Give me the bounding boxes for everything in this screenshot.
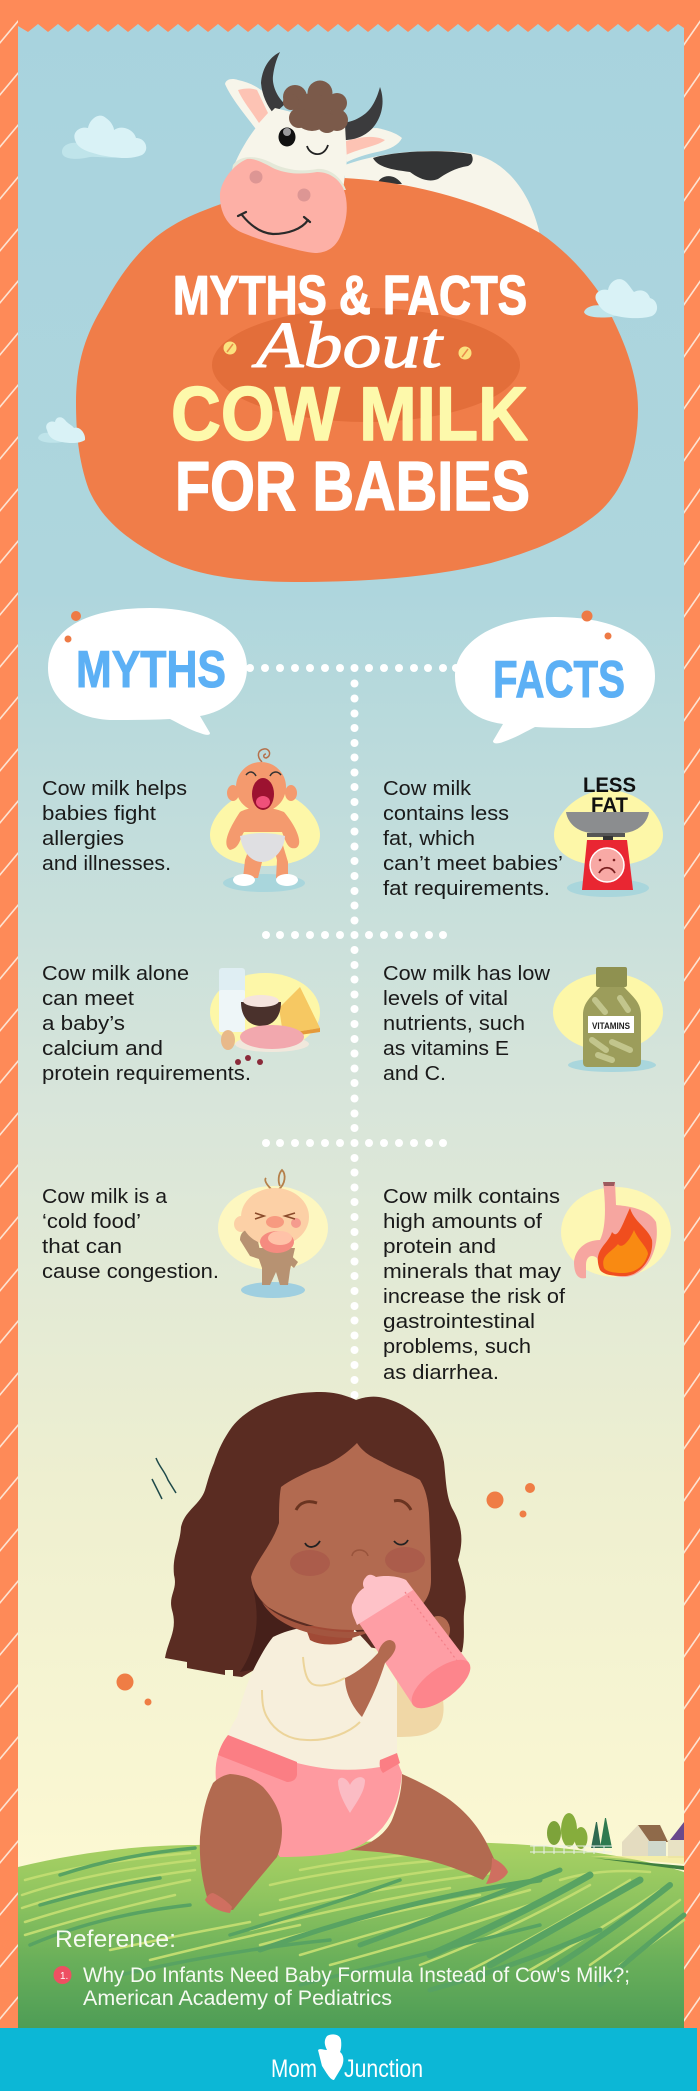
shirt collar [262, 1657, 360, 1740]
fact 2 text: Cow milk has low [383, 963, 551, 985]
blob inner ellipse [212, 308, 520, 422]
fact 3 text: gastrointestinal [383, 1311, 535, 1333]
fact 3 text: protein and [383, 1236, 496, 1258]
left horn [261, 52, 285, 114]
wink [307, 145, 328, 154]
icon: vitamins bottle [553, 967, 663, 1072]
icon: congested baby [218, 1170, 328, 1298]
reference block: 1. [60, 1971, 68, 1982]
myth 3 text: ‘cold food’ [42, 1211, 141, 1233]
fact 1 text: fat requirements. [383, 878, 550, 900]
myth 1 text: allergies [42, 828, 124, 850]
myth 1 text: Cow milk helps [42, 778, 187, 800]
myth 3 text: Cow milk is a [42, 1186, 168, 1208]
reference block: American Academy of Pediatrics [83, 1987, 392, 2010]
title: About [251, 309, 444, 382]
icon: less fat scale: LESS [583, 774, 636, 797]
right leg [350, 1774, 496, 1880]
reference block: Reference: [55, 1926, 176, 1953]
title: MYTHS & FACTS [173, 264, 527, 326]
myth 2 text: protein requirements. [42, 1063, 251, 1085]
fact 3 text: minerals that may [383, 1261, 561, 1283]
myth 1 text: babies fight [42, 803, 156, 825]
title [171, 264, 530, 525]
dotted connector lines [246, 664, 460, 1399]
myths speech bubble [48, 608, 247, 735]
feet [205, 1858, 508, 1913]
snout rim [230, 157, 346, 190]
facts speech bubble [455, 610, 655, 743]
cloud left small [38, 417, 85, 443]
hair [165, 1392, 466, 1677]
face [251, 1443, 431, 1630]
left ear inner [238, 88, 268, 123]
back arm [397, 1680, 444, 1737]
confetti dots [116, 1483, 535, 1706]
title: FOR BABIES [175, 447, 530, 525]
myth 2 text: can meet [42, 988, 134, 1010]
fact 2 text [383, 963, 551, 1085]
bottle [357, 1580, 469, 1705]
diaper straps [218, 1735, 400, 1782]
right horn [343, 87, 383, 140]
fact 2 text: and C. [383, 1063, 446, 1085]
myth 3 text: cause congestion. [42, 1261, 219, 1283]
title decorations [224, 342, 472, 360]
myths label: MYTHS [76, 641, 226, 699]
fact 3 text [383, 1186, 565, 1384]
motion lines [152, 1458, 176, 1499]
girl drinking from bottle [165, 1392, 508, 1913]
cow body behind blob [345, 151, 540, 235]
neck [305, 1626, 355, 1644]
myth 3 text [42, 1186, 219, 1283]
icon: less fat scale [554, 774, 663, 897]
left leg [200, 1774, 282, 1910]
icon: burning stomach [561, 1182, 671, 1278]
snout [220, 159, 347, 253]
fact 2 text: nutrients, such [383, 1013, 525, 1035]
nostrils [250, 170, 262, 184]
under hair shadow [240, 1585, 300, 1672]
cloud right [584, 279, 657, 318]
fact 3 text: Cow milk contains [383, 1186, 560, 1208]
myth 1 text: and illnesses. [42, 853, 171, 875]
eyebrows [296, 1501, 411, 1510]
icon: crying baby with rash [210, 749, 320, 892]
myth 3 text: that can [42, 1236, 122, 1258]
icon: trees and houses on horizon [530, 1813, 684, 1870]
icon: vitamins bottle: VITAMINS [592, 1021, 630, 1032]
hand on bottle [345, 1640, 396, 1717]
diaper heart [338, 1777, 365, 1813]
icon: dairy and protein foods [210, 968, 320, 1065]
facts label: FACTS [493, 651, 625, 709]
fact 3 text: high amounts of [383, 1211, 542, 1233]
right ear inner [346, 137, 385, 155]
fact 1 text: Cow milk [383, 778, 472, 800]
title: COW MILK [171, 372, 528, 457]
momjunction logo: Junction [344, 2055, 423, 2083]
momjunction logo [271, 2034, 423, 2083]
shirt [228, 1627, 397, 1770]
myth 2 text: Cow milk alone [42, 963, 189, 985]
fact 2 text: levels of vital [383, 988, 508, 1010]
right ear [345, 128, 402, 162]
eyes [305, 1540, 408, 1547]
smile [238, 212, 310, 234]
myth 2 text: calcium and [42, 1038, 163, 1060]
fact 3 text: problems, such [383, 1336, 531, 1358]
fact 1 text: fat, which [383, 828, 475, 850]
myth 2 text [42, 963, 251, 1085]
far hand behind bottle [426, 1616, 450, 1644]
reference block [54, 1926, 630, 2010]
fact 1 text [383, 778, 563, 900]
grass field [18, 1842, 684, 2028]
fact 1 text: contains less [383, 803, 509, 825]
reference block: Why Do Infants Need Baby Formula Instead of Cow's Milk?; [83, 1964, 630, 1987]
momjunction logo: Mom [271, 2055, 317, 2083]
title blob [76, 178, 638, 582]
nose [352, 1550, 368, 1556]
icon: less fat scale: FAT [591, 794, 628, 817]
cloud top left [62, 116, 146, 159]
myth 2 text: a baby’s [42, 1013, 125, 1035]
cow head [220, 52, 402, 253]
myth 1 text [42, 778, 187, 875]
left ear [225, 79, 274, 132]
fact 3 text: as diarrhea. [383, 1362, 499, 1384]
hair tuft [283, 80, 348, 133]
footer bar [0, 2028, 697, 2091]
face [233, 108, 347, 190]
diaper [216, 1755, 402, 1857]
eye [278, 128, 296, 146]
fact 1 text: can’t meet babies’ [383, 853, 563, 875]
fact 2 text: as vitamins E [383, 1038, 509, 1060]
cheeks [290, 1550, 330, 1576]
fact 3 text: increase the risk of [383, 1286, 565, 1308]
